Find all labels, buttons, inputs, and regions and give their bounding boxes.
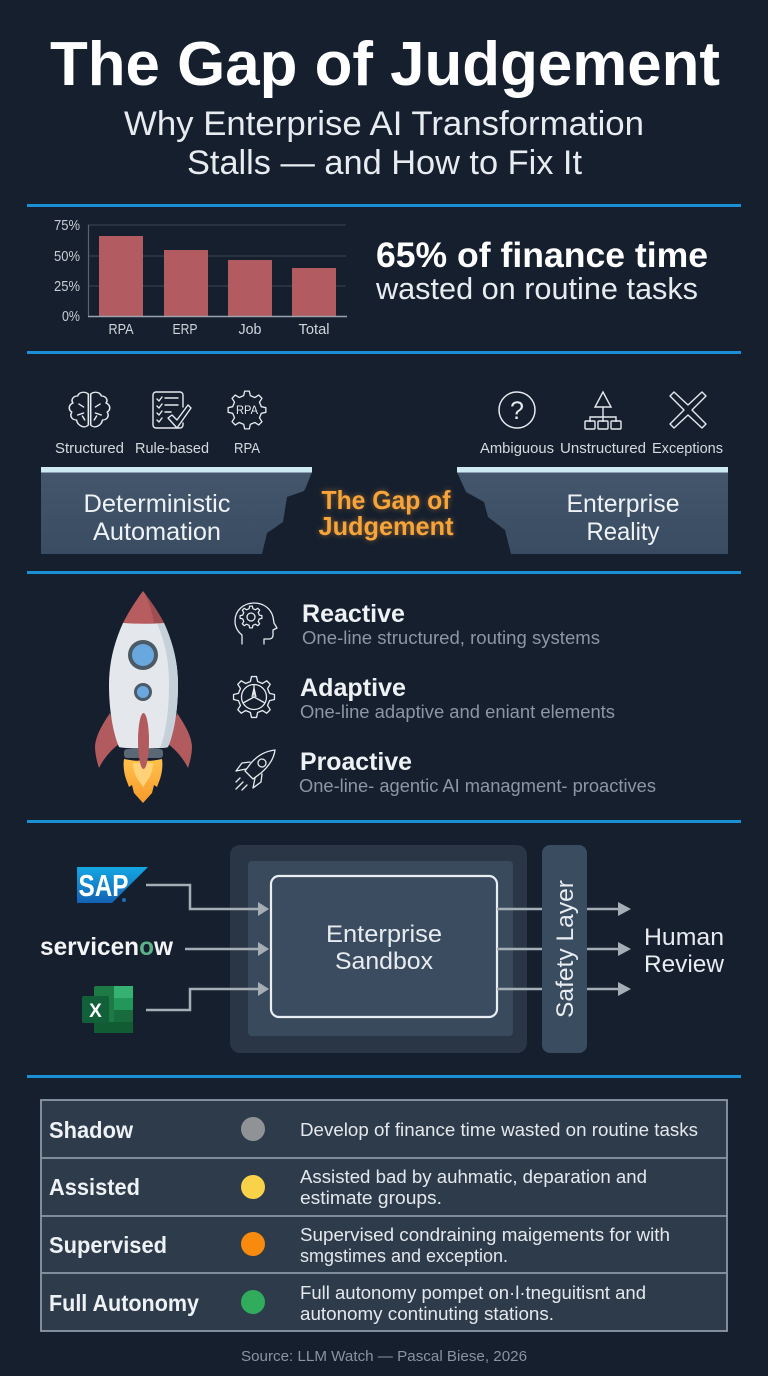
maturity stage: reactive: One-line structured, routing systems <box>302 628 600 648</box>
human review label: Review <box>644 951 725 978</box>
human review label: Human <box>644 924 724 951</box>
icon labels: Ambiguous <box>480 440 554 457</box>
arrows into sandbox <box>146 885 269 1010</box>
logo: SAP: SAP <box>78 868 128 903</box>
icon: question mark <box>499 392 535 428</box>
logo: Excel: X <box>89 1001 102 1022</box>
bar chart: 75% <box>54 218 80 234</box>
icon: exception cross <box>670 392 706 428</box>
icon labels: Exceptions <box>652 440 723 457</box>
panel: maturity <box>95 591 656 803</box>
row: full autonomy: autonomy continuting stations. <box>300 1303 554 1324</box>
row: supervised: Supervised <box>49 1232 167 1258</box>
row: assisted <box>49 1166 647 1208</box>
title: The Gap of Judgement <box>50 30 720 99</box>
icon: hierarchy <box>585 392 621 429</box>
maturity stage: proactive: Proactive <box>300 748 412 776</box>
header <box>50 30 720 182</box>
icon labels: Rule-based <box>135 440 209 457</box>
icon: head with gear <box>235 603 277 644</box>
panel: statistic <box>54 218 708 338</box>
statistic text: wasted on routine tasks <box>375 272 698 306</box>
icon labels: RPA <box>234 440 260 457</box>
sandbox layers <box>230 845 527 1053</box>
row: supervised: smgstimes and exception. <box>300 1245 508 1266</box>
icon: question mark: ? <box>510 397 524 425</box>
icon: rocket illustration <box>95 591 192 803</box>
row: shadow <box>49 1117 698 1143</box>
bar chart: 50% <box>54 249 80 265</box>
gap label: The Gap of <box>322 485 451 515</box>
row: full autonomy: Full autonomy pompet on·l·tneguitisnt and <box>300 1282 646 1303</box>
left cliff <box>41 467 312 554</box>
gap label: Judgement <box>318 511 454 541</box>
arrows to human review <box>587 902 631 996</box>
gap label: Judgement <box>318 511 454 541</box>
maturity stage: proactive <box>299 748 656 796</box>
subtitle <box>124 105 644 182</box>
maturity stage: adaptive <box>300 674 615 722</box>
panel: the gap <box>41 391 728 554</box>
row: shadow: Shadow <box>49 1117 134 1143</box>
right cliff: Reality <box>586 518 660 546</box>
row: shadow: Develop of finance time wasted on routine tasks <box>300 1119 698 1140</box>
subtitle: Stalls — and How to Fix It <box>187 144 582 182</box>
bar chart <box>54 218 347 338</box>
bar chart: 0% <box>62 309 80 325</box>
row: supervised: Supervised condraining maigements for with <box>300 1224 670 1245</box>
bar chart: 25% <box>54 279 80 295</box>
statistic text <box>375 236 708 306</box>
bar chart: ERP <box>172 322 198 338</box>
row: full autonomy: Full Autonomy <box>49 1290 199 1316</box>
sandbox layers: Enterprise <box>326 921 442 948</box>
arrows to safety layer <box>497 909 542 989</box>
statistic text: 65% of finance time <box>376 236 708 275</box>
icon labels <box>55 440 723 457</box>
maturity stage: adaptive: Adaptive <box>300 674 406 702</box>
icon: small rocket <box>236 750 275 790</box>
left cliff: Deterministic <box>84 490 230 518</box>
row: assisted: Assisted <box>49 1174 140 1200</box>
maturity stage: reactive <box>302 600 600 648</box>
bar chart: Total <box>298 322 330 338</box>
right cliff <box>457 467 728 554</box>
left cliff: Automation <box>93 518 221 546</box>
maturity stage: proactive: One-line- agentic AI managment- proactives <box>299 776 656 796</box>
icon labels: Unstructured <box>560 440 646 457</box>
row: supervised <box>49 1224 670 1266</box>
panel: architecture <box>40 845 725 1053</box>
maturity stage: adaptive: One-line adaptive and eniant elements <box>300 702 615 722</box>
gap label: The Gap of <box>322 485 451 515</box>
row: full autonomy <box>49 1282 646 1324</box>
gap label <box>318 485 454 541</box>
panel: autonomy table <box>41 1100 727 1331</box>
icon: RPA gear <box>228 391 266 429</box>
right cliff: Enterprise <box>566 490 680 518</box>
icon: RPA gear: RPA <box>236 403 258 417</box>
bar chart: RPA <box>108 322 134 338</box>
source note: Source: LLM Watch — Pascal Biese, 2026 <box>241 1349 527 1365</box>
subtitle: Why Enterprise AI Transformation <box>124 105 644 143</box>
logo: Excel <box>82 986 133 1033</box>
row: assisted: estimate groups. <box>300 1187 442 1208</box>
safety layer <box>542 845 587 1053</box>
bar chart: Job <box>238 322 262 338</box>
human review label <box>644 924 725 978</box>
maturity stage: reactive: Reactive <box>302 600 405 628</box>
row: assisted: Assisted bad by auhmatic, deparation and <box>300 1166 647 1187</box>
safety layer: Safety Layer <box>552 880 579 1018</box>
icon labels: Structured <box>55 440 124 457</box>
icon: brain <box>69 392 110 427</box>
sandbox layers: Sandbox <box>335 948 433 975</box>
icon: checklist <box>153 392 191 428</box>
logo: servicenow: servicenow <box>40 933 174 961</box>
icon: gear with nodes <box>234 677 274 717</box>
